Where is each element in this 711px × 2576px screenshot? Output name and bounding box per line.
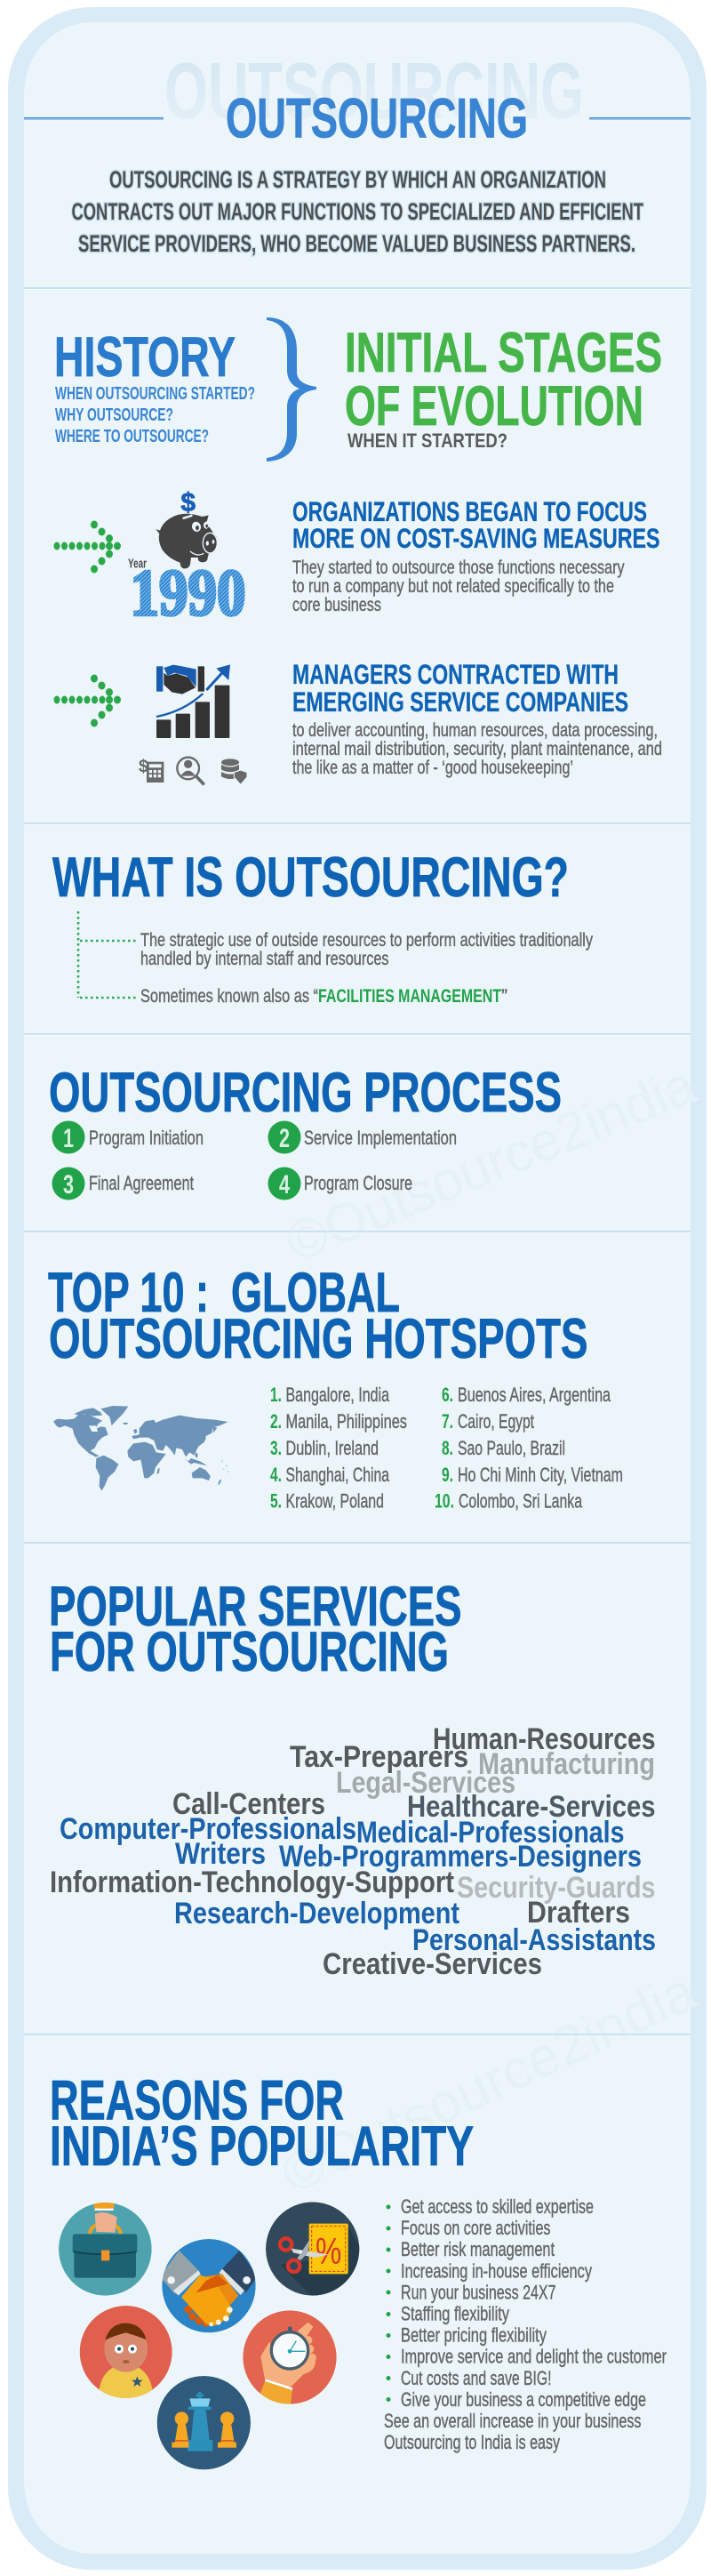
word cloud: Computer-Professionals — [60, 1812, 356, 1846]
icon: database shield — [221, 758, 247, 784]
stage text: to run a company but not related specifically to the — [292, 576, 614, 597]
step 3 — [52, 1167, 194, 1200]
list: hotspots 1 to 5: 1. — [270, 1384, 282, 1406]
list: hotspots 1 to 5: Bangalore, India — [286, 1384, 390, 1406]
stage heading — [292, 495, 659, 554]
list: hotspots 6 to 10: 8. — [442, 1437, 453, 1459]
list: reasons: Outsourcing to India is easy — [384, 2431, 560, 2453]
definition text: The strategic use of outside resources to perform activities traditionally — [140, 930, 593, 951]
arrow: dotted green — [53, 674, 121, 727]
year 1990: 1990 — [130, 557, 245, 630]
list: hotspots 1 to 5: Shanghai, China — [286, 1464, 390, 1486]
word cloud — [50, 1722, 656, 1981]
list: hotspots 6 to 10: Sao Paulo, Brazil — [458, 1437, 565, 1459]
word cloud: Information-Technology-Support — [50, 1866, 454, 1899]
word cloud: Web-Programmers-Designers — [279, 1840, 642, 1874]
list: hotspots 6 to 10: 10. — [435, 1490, 454, 1512]
label: year: Year — [128, 557, 147, 571]
word cloud: Writers — [175, 1837, 266, 1871]
word cloud: Research-Development — [174, 1897, 459, 1930]
list: hotspots 1 to 5: Manila, Philippines — [286, 1410, 407, 1432]
step 4 — [268, 1167, 412, 1200]
heading — [50, 2070, 474, 2178]
title rule right — [589, 117, 691, 120]
stage text — [292, 558, 625, 615]
heading: TOP 10 : GLOBAL — [48, 1262, 400, 1324]
panel: outsourcing process — [49, 1062, 562, 1200]
panel: top 10 hotspots — [48, 1262, 623, 1512]
definition text: FACILITIES MANAGEMENT — [318, 986, 501, 1007]
panel: stage managers — [53, 658, 662, 784]
step 4: 4 — [279, 1170, 290, 1200]
step 3: Final Agreement — [89, 1172, 194, 1194]
heading: history: HISTORY — [54, 326, 236, 389]
list: reasons: Better risk management — [401, 2238, 555, 2260]
panel: reasons for india's popularity — [50, 2070, 667, 2469]
list: hotspots 1 to 5: Dublin, Ireland — [286, 1437, 379, 1459]
icon: search person — [177, 758, 204, 783]
stage text: the like as a matter of - ‘good housekeeping’ — [292, 758, 573, 778]
list: reasons: Get access to skilled expertise — [401, 2195, 594, 2218]
list: hotspots 6 to 10: 9. — [442, 1464, 453, 1486]
list: reasons: Cut costs and save BIG! — [401, 2367, 551, 2389]
icon: handshake and growth chart — [156, 664, 230, 738]
heading: INDIA’S POPULARITY — [50, 2115, 474, 2178]
definition text — [140, 930, 593, 1007]
list: hotspots 1 to 5: 3. — [270, 1437, 282, 1459]
history questions: WHEN OUTSOURCING STARTED? — [55, 384, 255, 404]
icon: piggy bank — [156, 488, 218, 568]
icon: chess pieces — [157, 2376, 251, 2469]
list: hotspots 6 to 10: 6. — [442, 1384, 453, 1406]
icon: person — [80, 2306, 172, 2401]
icon: handshake — [160, 2239, 258, 2332]
heading — [49, 1576, 462, 1683]
list: reasons: Better pricing flexibility — [401, 2324, 547, 2346]
panel: history — [54, 317, 662, 461]
word cloud: Call-Centers — [172, 1787, 325, 1821]
step 2 — [268, 1120, 457, 1154]
list: hotspots 6 to 10: Colombo, Sri Lanka — [459, 1490, 583, 1512]
list: reasons: Focus on core activities — [401, 2217, 551, 2239]
word cloud: Medical-Professionals — [356, 1816, 624, 1850]
stage text — [292, 720, 662, 778]
panel: popular services — [49, 1576, 656, 1981]
list: hotspots 1 to 5: 4. — [270, 1464, 282, 1486]
panel: title and intro — [24, 47, 691, 257]
icon: briefcase — [59, 2203, 152, 2296]
panel: stage 1990 — [53, 488, 659, 630]
panel: what is outsourcing — [52, 847, 593, 1007]
step 1: 1 — [63, 1124, 74, 1153]
icon: stopwatch — [243, 2310, 337, 2407]
title rule left — [24, 117, 164, 120]
step 1 — [52, 1120, 204, 1154]
word cloud: Creative-Services — [323, 1947, 542, 1981]
list: hotspots 1 to 5: 5. — [270, 1490, 282, 1512]
word cloud: Manufacturing — [478, 1747, 655, 1781]
list: hotspots 6 to 10 — [435, 1384, 623, 1512]
word cloud: Drafters — [527, 1896, 630, 1930]
intro text — [71, 166, 643, 257]
icon: coupon and scissors: % — [316, 2230, 341, 2272]
icon: piggy bank: $ — [180, 488, 196, 518]
list: reasons: Run your business 24X7 — [401, 2282, 556, 2303]
definition text: Sometimes known also as “ — [140, 986, 318, 1007]
step 2: 2 — [279, 1124, 290, 1153]
list: hotspots 6 to 10: Buenos Aires, Argentina — [458, 1384, 611, 1406]
heading — [48, 1262, 588, 1370]
word cloud: Personal-Assistants — [412, 1923, 656, 1957]
word cloud: Tax-Preparers — [290, 1740, 468, 1774]
definition text: ” — [501, 986, 507, 1007]
heading: POPULAR SERVICES — [49, 1576, 462, 1638]
definition text: handled by internal staff and resources — [140, 949, 389, 969]
icon: calculator: $ — [139, 757, 148, 776]
list: reasons — [384, 2195, 667, 2453]
watermark upper: ©Outsource2india — [277, 1054, 705, 1274]
step 4: Program Closure — [304, 1172, 412, 1194]
list: hotspots 1 to 5: 2. — [270, 1410, 282, 1432]
icon: coupon and scissors — [266, 2202, 360, 2297]
brace — [267, 317, 316, 461]
list: reasons: Increasing in-house efficiency — [401, 2260, 592, 2282]
heading: FOR OUTSOURCING — [50, 1621, 449, 1683]
list: hotspots 6 to 10: 7. — [442, 1410, 453, 1432]
world map — [53, 1406, 228, 1491]
subheading: WHEN IT STARTED? — [348, 429, 507, 452]
dotted connector — [78, 911, 137, 998]
history questions — [55, 384, 255, 446]
section dividers — [24, 287, 691, 2036]
step 2: Service Implementation — [304, 1127, 457, 1149]
list: hotspots 1 to 5: Krakow, Poland — [286, 1490, 384, 1512]
word cloud: Human-Resources — [433, 1722, 656, 1756]
step 3: 3 — [63, 1170, 74, 1200]
icon: calculator — [139, 757, 164, 782]
heading: REASONS FOR — [50, 2070, 344, 2132]
arrow: dotted green — [53, 521, 121, 573]
step 1: Program Initiation — [89, 1127, 204, 1149]
list: hotspots 6 to 10: Cairo, Egypt — [458, 1410, 534, 1432]
list: hotspots 6 to 10: Ho Chi Minh City, Vietnam — [458, 1464, 623, 1486]
stage text: core business — [292, 595, 381, 615]
title: OUTSOURCING — [226, 87, 528, 149]
list: hotspots 1 to 5 — [270, 1384, 407, 1512]
list: reasons: Staffing flexibility — [401, 2303, 509, 2324]
history questions: WHERE TO OUTSOURCE? — [55, 427, 209, 446]
watermark lower: ©Outsource2india — [273, 1961, 706, 2206]
word cloud: Legal-Services — [336, 1766, 515, 1800]
word cloud: Healthcare-Services — [407, 1790, 656, 1824]
stage heading — [292, 658, 628, 718]
history questions: WHY OUTSOURCE? — [55, 405, 173, 425]
list: bullets — [386, 2205, 391, 2402]
heading: initial stages — [345, 322, 662, 437]
word cloud: Security-Guards — [457, 1871, 656, 1905]
